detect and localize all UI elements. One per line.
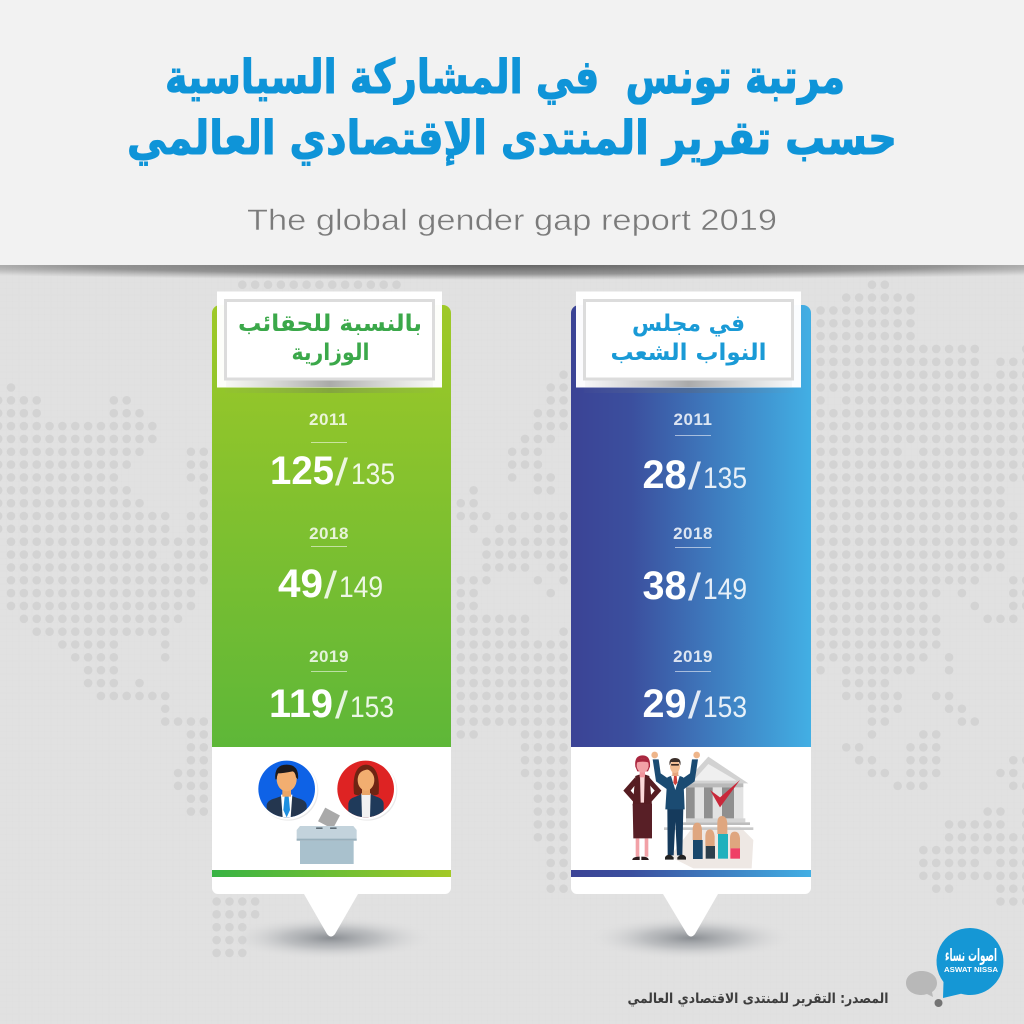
bottom strip — [571, 870, 811, 877]
icon: temple — [664, 757, 753, 830]
rank 49/149: 49 — [278, 562, 323, 606]
heading box: الوزارية — [292, 340, 370, 366]
icon: parliament building and people — [623, 752, 753, 868]
rank 38/149: 38 — [642, 564, 686, 608]
rank 38/149 — [642, 564, 747, 609]
rank 119/153 — [269, 682, 394, 727]
icon: ballot paper — [318, 808, 340, 829]
rank 28/135: 135 — [703, 462, 747, 495]
long shadow — [670, 827, 753, 868]
rank 29/153: / — [688, 685, 702, 727]
heading box: النواب الشعب — [610, 340, 766, 366]
rank 38/149: 149 — [703, 573, 747, 606]
year 2019: 2019 — [673, 647, 713, 666]
rank 119/153: / — [335, 685, 349, 727]
rank 119/153: 119 — [269, 682, 333, 726]
rank 49/149 — [278, 562, 383, 607]
grey dot — [934, 999, 942, 1007]
blue gradient body — [571, 305, 811, 747]
rank 28/135: / — [688, 456, 702, 498]
heading box: بالنسبة للحقائب — [238, 311, 422, 337]
pointer shadow: left — [227, 916, 435, 960]
icon: candidates and ballot box — [257, 760, 397, 864]
icon: male candidate — [257, 760, 318, 821]
rank 29/153: 153 — [703, 691, 747, 724]
rank 49/149: / — [324, 565, 338, 607]
title — [127, 50, 897, 166]
rank 125/135: / — [335, 452, 349, 494]
year 2019: 2019 — [309, 647, 349, 666]
panel: cabinet portfolios — [212, 292, 451, 936]
year 2011: 2011 — [674, 410, 712, 429]
green gradient body — [212, 305, 451, 747]
dotted world map — [0, 285, 1024, 953]
grey speech bubble — [906, 971, 937, 997]
icon: female candidate — [336, 760, 397, 821]
heading box — [576, 292, 801, 393]
rank 49/149: 149 — [339, 571, 383, 604]
logo Latin text: ASWAT NISSA — [944, 965, 999, 974]
heading box: في مجلس — [632, 311, 745, 337]
heading box — [217, 292, 442, 393]
title: مرتبة تونس في المشاركة السياسية — [165, 50, 845, 105]
logo: Aswat Nissa — [906, 928, 1003, 1007]
rank 119/153: 153 — [350, 691, 394, 724]
rank 125/135: 135 — [351, 458, 395, 491]
panel card base with pointer — [212, 747, 451, 936]
rank 125/135 — [270, 449, 395, 494]
icon: bar chart hands — [693, 816, 740, 859]
rank 125/135: 125 — [270, 449, 334, 493]
year 2018: 2018 — [673, 524, 713, 543]
rank 28/135 — [642, 453, 747, 498]
source note: المصدر: التقرير للمنتدى الاقتصادي العالمي — [628, 991, 888, 1008]
icon: red check mark — [710, 780, 740, 807]
year 2011: 2011 — [309, 410, 348, 429]
rank 29/153 — [642, 682, 747, 727]
icon: woman — [623, 755, 661, 860]
year 2018: 2018 — [309, 524, 349, 543]
bottom strip — [212, 870, 451, 877]
icon: man — [651, 752, 700, 860]
panel: parliament — [571, 292, 811, 936]
subtitle: The global gender gap report 2019 — [247, 204, 777, 237]
icon: ballot box — [297, 826, 357, 864]
year 2011 — [309, 410, 348, 443]
pointer shadow: right — [587, 916, 795, 960]
rank 29/153: 29 — [642, 682, 686, 726]
rank 38/149: / — [688, 567, 702, 609]
panel card base with pointer — [571, 747, 811, 936]
header band — [0, 0, 1024, 280]
rank 28/135: 28 — [642, 453, 686, 497]
blue speech bubble — [936, 928, 1003, 998]
title: حسب تقرير المنتدى الإقتصادي العالمي — [127, 111, 897, 166]
